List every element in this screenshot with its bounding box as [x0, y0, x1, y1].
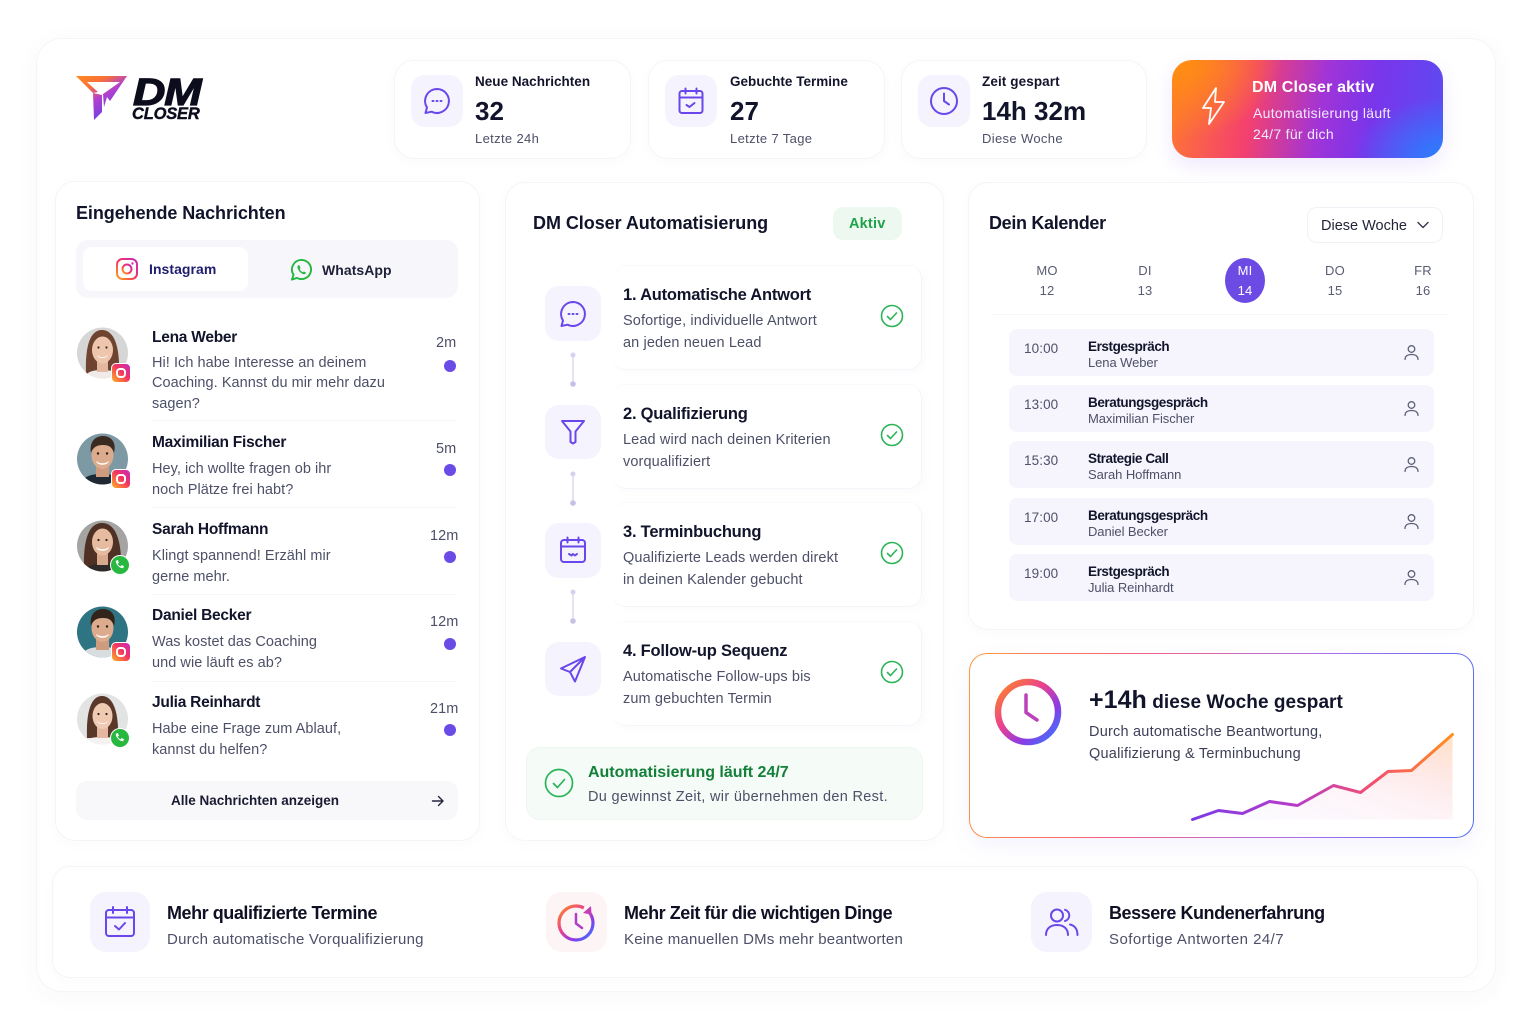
panel: Dein Kalender — [968, 182, 1474, 630]
icon: calendar — [665, 75, 717, 127]
dropdown: Diese Woche — [1307, 207, 1443, 243]
message: Sarah Hoffmann: Sarah Hoffmann — [152, 521, 268, 538]
day: Donnerstag — [1325, 263, 1345, 298]
icon: calendar check — [90, 892, 150, 952]
message: Maximilian Fischer: Maximilian Fischer — [152, 434, 286, 451]
icon: check — [544, 768, 574, 798]
icon: person — [1404, 570, 1419, 586]
benefit: Mehr qualifizierte Termine — [90, 892, 424, 952]
day: Mittwoch active — [1225, 258, 1265, 303]
benefit: Bessere Kundenerfahrung: Sofortige Antworten 24/7 — [1109, 931, 1284, 948]
message: Daniel Becker: Daniel Becker — [152, 607, 251, 624]
avatar: Lena Weber — [77, 328, 128, 378]
appointment: 17:00 Beratungsgespräch: Daniel Becker — [1088, 524, 1168, 539]
step 4: Follow-up Sequenz: 4. Follow-up Sequenz — [623, 642, 787, 660]
message: Maximilian Fischer: 5m — [436, 441, 456, 457]
step 1: Automatische Antwort — [545, 270, 922, 370]
panel: +14h diese Woche gespart: Qualifizierung & Terminbuchung — [1089, 746, 1301, 762]
week strip — [1036, 258, 1432, 303]
callout: DM Closer aktiv: Automatisierung läuft — [1253, 105, 1391, 121]
day: Montag: MO — [1036, 263, 1058, 278]
step 2: Qualifizierung: vorqualifiziert — [623, 454, 710, 470]
icon: check — [880, 542, 904, 564]
benefit: Mehr qualifizierte Termine: Durch automatische Vorqualifizierung — [167, 931, 424, 948]
benefit: Mehr Zeit für die wichtigen Dinge — [546, 892, 903, 952]
dropdown: Diese Woche: Diese Woche — [1321, 218, 1407, 234]
stat card: Neue Nachrichten: 32 — [475, 96, 504, 126]
step 4: Follow-up Sequenz — [545, 626, 922, 726]
stat card: Neue Nachrichten: Letzte 24h — [475, 131, 539, 146]
day: Donnerstag: 15 — [1328, 283, 1342, 298]
badge: Instagram — [111, 469, 131, 489]
icon: check — [880, 660, 904, 684]
icon: lightning — [1202, 87, 1225, 125]
message: Sarah Hoffmann: 12m — [430, 528, 458, 544]
callout: Automatisierung läuft 24/7: Du gewinnst Zeit, wir übernehmen den Rest. — [588, 789, 888, 805]
tab: WhatsApp: WhatsApp — [322, 262, 392, 278]
icon: gradient clock — [546, 892, 607, 952]
message: Maximilian Fischer: Hey, ich wollte fragen ob ihr — [152, 461, 331, 477]
stat card: Gebuchte Termine: Gebuchte Termine — [730, 74, 848, 89]
message: Daniel Becker — [77, 606, 458, 671]
appointment: 19:00 Erstgespräch: 19:00 — [1024, 566, 1058, 581]
panel: +14h diese Woche gespart: Durch automatische Beantwortung, — [1089, 724, 1323, 740]
tab: WhatsApp — [290, 259, 392, 280]
day: Freitag — [1414, 263, 1432, 298]
message: Sarah Hoffmann: gerne mehr. — [152, 569, 230, 585]
icon: arrow right — [432, 796, 444, 806]
panel: +14h diese Woche gespart — [969, 653, 1474, 838]
stat card: Gebuchte Termine — [648, 60, 885, 159]
step 1: Automatische Antwort: 1. Automatische Antwort — [623, 286, 811, 304]
appointment: 10:00 Erstgespräch: Lena Weber — [1088, 355, 1158, 370]
tab: Instagram: Instagram — [149, 261, 216, 277]
heading: DM Closer Automatisierung: DM Closer Automatisierung — [533, 213, 768, 233]
step 1: Automatische Antwort: Sofortige, individuelle Antwort — [623, 313, 817, 329]
callout: DM Closer aktiv — [1172, 60, 1443, 158]
message: Julia Reinhardt — [77, 694, 458, 758]
icon: check — [880, 304, 904, 328]
message: Julia Reinhardt: Julia Reinhardt — [152, 694, 260, 711]
stat card: Zeit gespart: Zeit gespart — [982, 74, 1060, 89]
icon: gradient clock — [994, 678, 1062, 746]
logo: DM Closer — [76, 72, 204, 123]
button: Alle Nachrichten anzeigen — [76, 781, 458, 820]
message: Julia Reinhardt: Habe eine Frage zum Ablauf, — [152, 721, 341, 737]
stat card: Gebuchte Termine: Letzte 7 Tage — [730, 131, 812, 146]
icon: check — [880, 424, 904, 446]
icon: people — [1031, 892, 1092, 952]
day: Montag — [1036, 263, 1058, 298]
message: Maximilian Fischer — [77, 434, 456, 498]
day: Dienstag: 13 — [1138, 283, 1152, 298]
message: Julia Reinhardt: kannst du helfen? — [152, 742, 267, 758]
badge: WhatsApp — [110, 555, 130, 575]
heading: Dein Kalender: Dein Kalender — [989, 213, 1106, 233]
message: Sarah Hoffmann — [77, 520, 458, 585]
icon: clock — [918, 75, 970, 127]
appointment: 15:30 Strategie Call — [1009, 441, 1434, 488]
icon: person — [1404, 514, 1419, 530]
appointment: 19:00 Erstgespräch: Erstgespräch — [1088, 564, 1169, 579]
benefit: Bessere Kundenerfahrung: Bessere Kundenerfahrung — [1109, 903, 1325, 923]
appointment: 13:00 Beratungsgespräch: Maximilian Fischer — [1088, 411, 1194, 426]
tab: Instagram — [83, 247, 248, 291]
stat card: Neue Nachrichten: Neue Nachrichten — [475, 74, 590, 89]
stat card: Gebuchte Termine: 27 — [730, 96, 759, 126]
message: Daniel Becker: und wie läuft es ab? — [152, 655, 282, 671]
step 2: Qualifizierung: Lead wird nach deinen Kriterien — [623, 432, 831, 448]
day: Donnerstag: DO — [1325, 263, 1345, 278]
message: Lena Weber: 2m — [436, 335, 456, 351]
tabs: Instagram and WhatsApp — [76, 240, 458, 298]
appointment: 15:30 Strategie Call: 15:30 — [1024, 453, 1058, 468]
logo: DM Closer: DM — [133, 72, 200, 114]
connector: step 1 to 2 — [570, 352, 576, 387]
panel: benefits — [52, 866, 1478, 978]
step 4: Follow-up Sequenz: Automatische Follow-ups bis — [623, 669, 811, 685]
appointment: 13:00 Beratungsgespräch — [1009, 385, 1434, 432]
benefit: Mehr Zeit für die wichtigen Dinge: Keine manuellen DMs mehr beantworten — [624, 931, 903, 948]
day: Montag: 12 — [1040, 283, 1054, 298]
stat card: Neue Nachrichten — [394, 60, 631, 159]
step 4: Follow-up Sequenz: zum gebuchten Termin — [623, 691, 772, 707]
day: Freitag: 16 — [1416, 283, 1430, 298]
day: Mittwoch active: 14 — [1238, 283, 1252, 298]
message: Maximilian Fischer: noch Plätze frei habt? — [152, 482, 293, 498]
callout: DM Closer aktiv: DM Closer aktiv — [1252, 79, 1374, 96]
step 3: Terminbuchung — [545, 506, 922, 607]
stat card: Zeit gespart: Diese Woche — [982, 131, 1063, 146]
icon: person — [1404, 457, 1419, 472]
day: Dienstag — [1138, 263, 1152, 298]
avatar: Sarah Hoffmann — [77, 520, 128, 572]
step 2: Qualifizierung: 2. Qualifizierung — [623, 405, 748, 423]
connector: step 3 to 4 — [570, 590, 576, 624]
benefit: Bessere Kundenerfahrung — [1031, 892, 1325, 952]
message: Lena Weber: Hi! Ich habe Interesse an deinem — [152, 355, 366, 371]
icon: paper plane — [545, 642, 601, 696]
message: Julia Reinhardt: 21m — [430, 701, 458, 717]
badge: WhatsApp — [110, 728, 130, 748]
appointment: 17:00 Beratungsgespräch — [1009, 498, 1434, 545]
text: headline: +14h diese Woche gespart — [1089, 686, 1343, 714]
message: Daniel Becker: Was kostet das Coaching — [152, 634, 317, 650]
connector: step 2 to 3 — [570, 472, 576, 506]
icon: chat bubble — [411, 75, 463, 127]
avatar: Julia Reinhardt — [77, 694, 128, 744]
avatar: Daniel Becker — [77, 606, 128, 658]
appointment: 13:00 Beratungsgespräch: Beratungsgespräch — [1088, 395, 1208, 410]
heading: Eingehende Nachrichten: Eingehende Nachrichten — [76, 203, 286, 223]
message: Lena Weber — [77, 328, 456, 412]
callout: Automatisierung läuft 24/7: Automatisierung läuft 24/7 — [588, 764, 789, 781]
icon: chevron — [1417, 222, 1429, 228]
icon: person — [1404, 345, 1419, 360]
appointment: 15:30 Strategie Call: Sarah Hoffmann — [1088, 467, 1181, 482]
stat card: Zeit gespart — [901, 60, 1147, 159]
appointment: 19:00 Erstgespräch: Julia Reinhardt — [1088, 580, 1174, 595]
message: Sarah Hoffmann: Klingt spannend! Erzähl mir — [152, 548, 331, 564]
badge: Instagram — [111, 363, 131, 383]
callout: Automatisierung läuft 24/7 — [526, 747, 923, 820]
panel: Eingehende Nachrichten — [55, 181, 480, 841]
message: Daniel Becker: 12m — [430, 614, 458, 630]
appointment: 17:00 Beratungsgespräch: Beratungsgespräch — [1088, 508, 1208, 523]
appointment: 13:00 Beratungsgespräch: 13:00 — [1024, 397, 1058, 412]
day: Dienstag: DI — [1138, 263, 1152, 278]
message: Lena Weber: sagen? — [152, 396, 200, 412]
appointment: 15:30 Strategie Call: Strategie Call — [1088, 451, 1168, 466]
appointment: 10:00 Erstgespräch: 10:00 — [1024, 341, 1058, 356]
step 1: Automatische Antwort: an jeden neuen Lead — [623, 335, 762, 351]
icon: chat bubble — [545, 286, 601, 341]
step 3: Terminbuchung: 3. Terminbuchung — [623, 523, 761, 541]
icon: person — [1404, 401, 1419, 416]
status pill: Aktiv: Aktiv — [849, 216, 885, 232]
logo: DM Closer: CLOSER — [132, 105, 200, 123]
callout: DM Closer aktiv: 24/7 für dich — [1253, 126, 1334, 142]
step 3: Terminbuchung: Qualifizierte Leads werden direkt — [623, 550, 838, 566]
button: Alle Nachrichten anzeigen: Alle Nachrichten anzeigen — [171, 793, 339, 808]
day: Freitag: FR — [1414, 263, 1432, 278]
appointment: 10:00 Erstgespräch: Erstgespräch — [1088, 339, 1169, 354]
day: Mittwoch active: MI — [1238, 263, 1252, 278]
icon: calendar — [545, 523, 601, 578]
chart: time saved trend — [1191, 732, 1454, 821]
status pill: Aktiv — [833, 207, 902, 240]
step 3: Terminbuchung: in deinen Kalender gebucht — [623, 572, 803, 588]
message: Lena Weber: Lena Weber — [152, 329, 237, 346]
appointment: 17:00 Beratungsgespräch: 17:00 — [1024, 510, 1058, 525]
panel: DM Closer Automatisierung — [505, 182, 944, 841]
benefit: Mehr qualifizierte Termine: Mehr qualifizierte Termine — [167, 903, 377, 923]
message: Lena Weber: Coaching. Kannst du mir mehr dazu — [152, 375, 385, 391]
avatar: Maximilian Fischer — [77, 434, 128, 484]
appointment: 10:00 Erstgespräch — [1009, 329, 1434, 376]
badge: Instagram — [111, 642, 131, 662]
appointment: 19:00 Erstgespräch — [1009, 554, 1434, 601]
icon: funnel — [545, 405, 601, 459]
stat card: Zeit gespart: 14h 32m — [982, 96, 1086, 126]
benefit: Mehr Zeit für die wichtigen Dinge: Mehr Zeit für die wichtigen Dinge — [624, 903, 892, 923]
step 2: Qualifizierung — [545, 388, 922, 489]
